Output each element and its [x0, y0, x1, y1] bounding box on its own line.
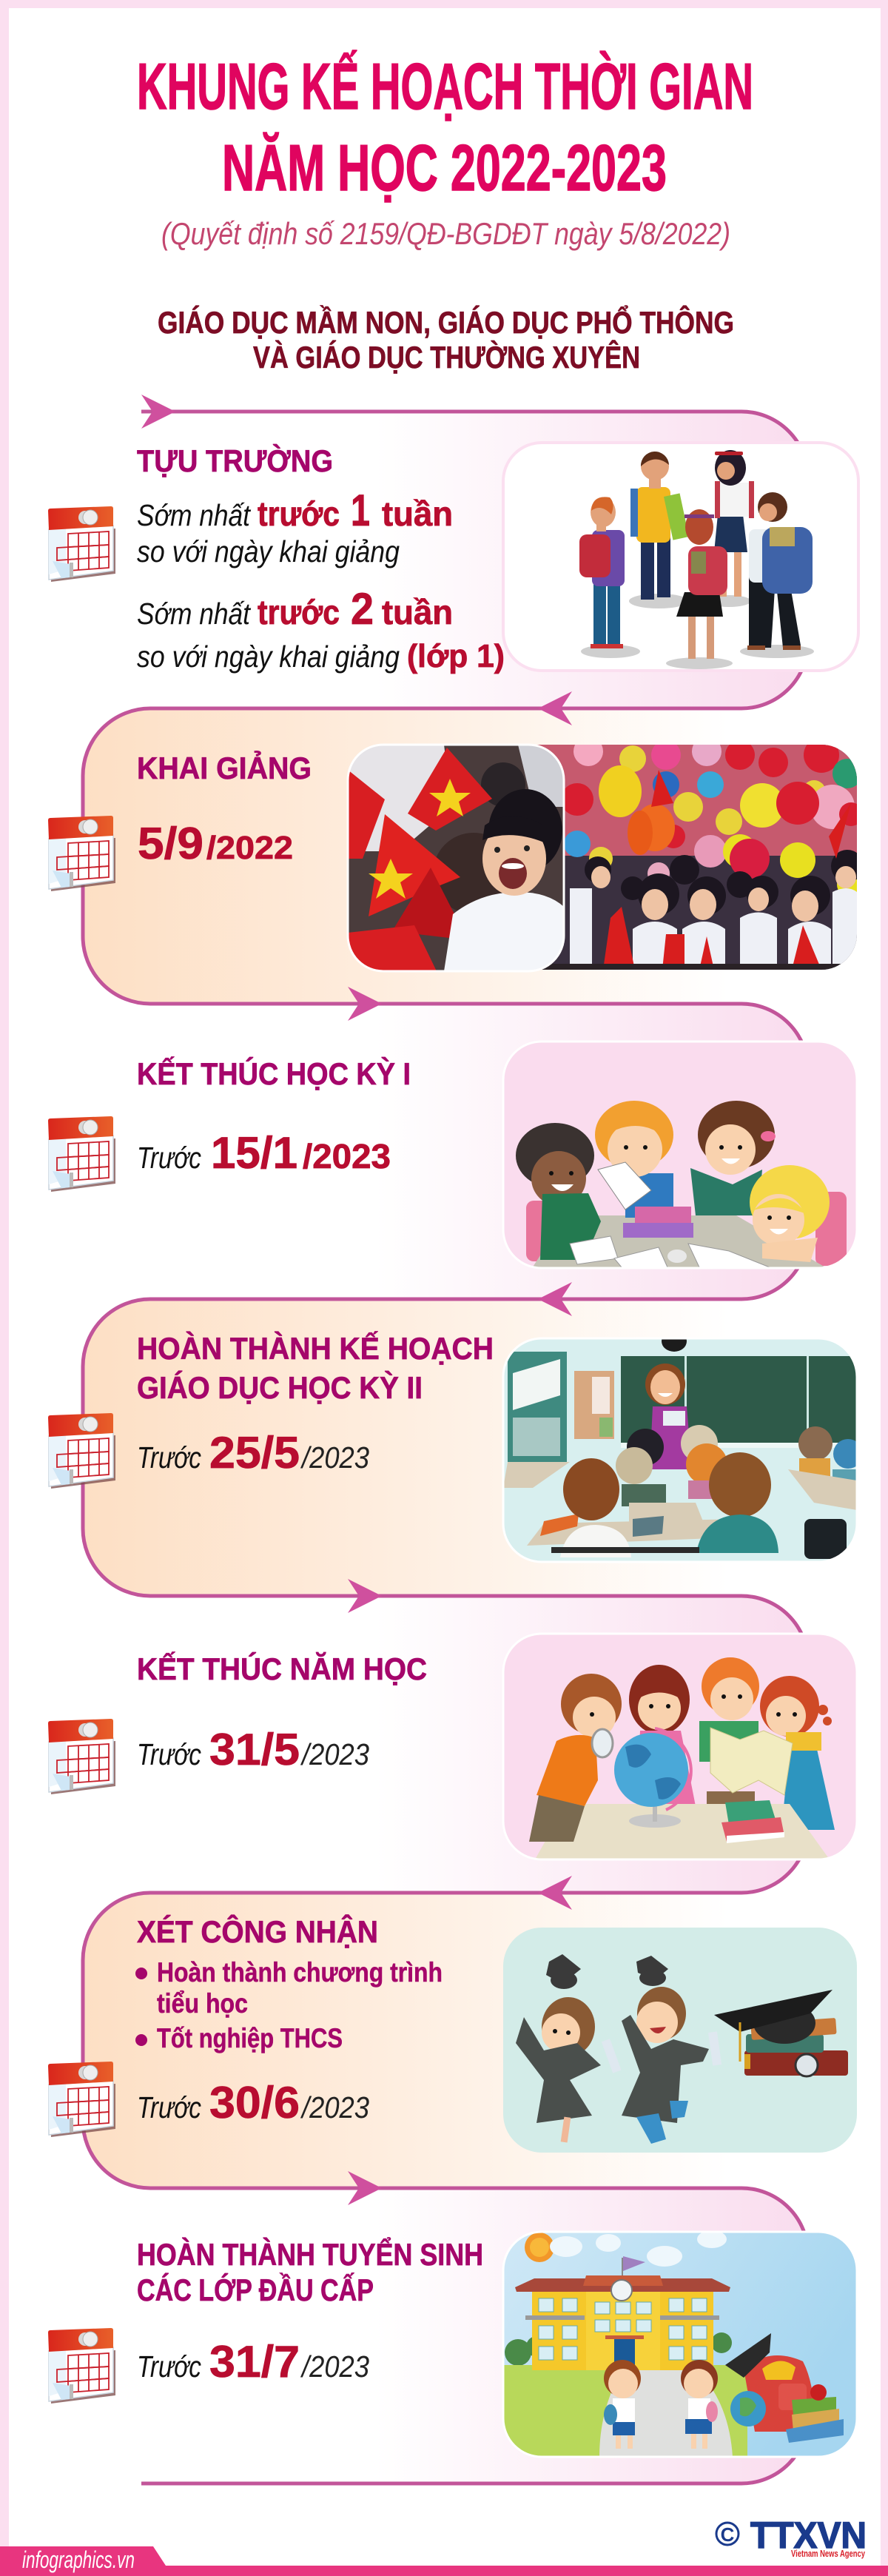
papers on table — [570, 1236, 770, 1267]
student A red backpack — [579, 497, 625, 648]
boy graduate — [622, 1987, 722, 2144]
text: two weeks early for grade 1: Sớm nhất — [137, 597, 251, 631]
section heading: GIÁO DỤC MẦM NON, GIÁO DỤC PHỔ THÔNG — [158, 303, 734, 340]
date: 25/5/2023 — [137, 1428, 369, 1477]
heading: ket thuc hoc ky I: KẾT THÚC HỌC KỲ I — [137, 1056, 411, 1091]
date: 5/9/2022: 5/9 — [138, 819, 204, 868]
date: 30/6/2023: 30/6 — [209, 2078, 300, 2127]
student E blue backpack — [747, 492, 813, 650]
section heading — [158, 303, 734, 375]
date: 15/1/2023: 15/1 — [211, 1128, 297, 1178]
text: two weeks early for grade 1 — [137, 584, 505, 674]
row 5: end of school year — [48, 1651, 427, 1794]
title — [137, 50, 753, 204]
trees — [505, 2332, 732, 2366]
icon: calendar — [48, 1116, 115, 1192]
heading: hoan thanh tuyen sinh cac lop dau cap: HOÀN THÀNH TUYỂN SINH — [137, 2236, 483, 2272]
text: one week early: so với ngày khai giảng — [137, 534, 400, 568]
date: 25/5/2023: 25/5 — [209, 1428, 300, 1477]
date: 31/7/2023: 31/7 — [209, 2337, 300, 2387]
date: 30/6/2023 — [137, 2078, 369, 2127]
backpack, globe, books — [725, 2333, 844, 2443]
frame of globe illustration — [503, 1634, 857, 1859]
illustration: classroom — [503, 1331, 863, 1562]
open book — [598, 1162, 651, 1210]
middle row of students — [616, 1425, 727, 1506]
folded map — [710, 1728, 793, 1795]
illustration: children with globe — [503, 1634, 857, 1859]
books and mortarboard — [714, 1990, 848, 2076]
icon: calendar — [48, 1413, 115, 1489]
text: two weeks early for grade 1: (lớp 1) — [407, 638, 505, 674]
row 3: end of semester 1 — [48, 1056, 411, 1192]
logo: TTXVN: C — [721, 2523, 735, 2546]
title: NĂM HỌC 2022-2023 — [222, 131, 667, 204]
building — [515, 2275, 730, 2370]
illustration: graduates jumping — [503, 1928, 857, 2153]
date: 15/1/2023: /2023 — [303, 1137, 391, 1175]
text: two weeks early for grade 1: tuần — [382, 593, 453, 631]
bullet list — [135, 1957, 443, 2053]
text: one week early: trước — [258, 494, 340, 533]
footer band — [0, 2546, 888, 2576]
text: one week early: 1 — [351, 486, 370, 535]
frame of child photo — [348, 745, 564, 971]
icon: calendar — [48, 506, 115, 582]
frame of classroom illustration — [503, 1338, 857, 1562]
row 7: finish enrollment — [48, 2236, 483, 2404]
desks — [503, 1462, 857, 1546]
heading: hoan thanh ke hoach giao duc hoc ky II: HOÀN THÀNH KẾ HOẠCH — [137, 1331, 494, 1366]
boy with orange hair — [595, 1101, 673, 1218]
bullet list: Hoàn thành chương trình — [157, 1957, 443, 1988]
illustration: group of students — [505, 444, 814, 669]
bullet list: tiểu học — [157, 1988, 248, 2019]
row 2: opening day — [48, 750, 312, 891]
girl — [681, 2360, 718, 2449]
icon: calendar — [48, 816, 115, 891]
boy in green with map — [699, 1657, 759, 1806]
girl graduate — [516, 1997, 622, 2143]
illustration: school building — [503, 2230, 857, 2457]
student B yellow jacket — [630, 452, 689, 600]
footer text: infographics.vn — [22, 2546, 135, 2573]
date: 30/6/2023: Trước — [137, 2090, 201, 2124]
globe — [614, 1728, 691, 1828]
boy with dark hair — [516, 1123, 601, 1260]
boy with magnifier — [529, 1674, 622, 1842]
text: two weeks early for grade 1: so với ngày khai giảng — [137, 640, 400, 674]
date: 5/9/2022: /2022 — [206, 830, 293, 866]
frame of student illustration — [503, 443, 858, 671]
heading: xet cong nhan: XÉT CÔNG NHẬN — [137, 1913, 378, 1949]
heading: ket thuc nam hoc: KẾT THÚC NĂM HỌC — [137, 1651, 427, 1686]
icon: calendar — [48, 2062, 115, 2137]
date: 25/5/2023: Trước — [137, 1440, 201, 1475]
date: 15/1/2023 — [137, 1128, 391, 1178]
sun and clouds — [525, 2230, 727, 2267]
arrows on the timeline — [141, 395, 572, 2205]
icon: calendar — [48, 1719, 115, 1794]
date: 31/5/2023: Trước — [137, 1737, 201, 1771]
logo: TTXVN — [716, 2515, 867, 2559]
boy — [604, 2360, 641, 2449]
bullet list: Tốt nghiệp THCS — [157, 2023, 343, 2053]
teacher with brown hair — [690, 1101, 776, 1215]
date: 30/6/2023: /2023 — [300, 2090, 369, 2124]
heading: tuu truong: TỰU TRƯỜNG — [137, 443, 333, 478]
date: 31/5/2023 — [137, 1725, 369, 1774]
stacked pink books — [623, 1207, 693, 1238]
frame of school illustration — [503, 2232, 857, 2457]
student D centre backpack — [676, 509, 727, 659]
heading: hoan thanh tuyen sinh cac lop dau cap — [137, 2236, 483, 2307]
date: 31/7/2023: /2023 — [300, 2349, 369, 2384]
right side students — [798, 1426, 855, 1480]
date: 31/7/2023: Trước — [137, 2349, 201, 2384]
date: 31/7/2023 — [137, 2337, 369, 2387]
frame of studying illustration — [503, 1042, 857, 1268]
date: 25/5/2023: /2023 — [300, 1440, 369, 1475]
text: one week early: Sớm nhất — [137, 498, 251, 532]
row background panels — [83, 412, 808, 2483]
blonde girl — [750, 1165, 830, 1262]
date: 31/5/2023: 31/5 — [209, 1725, 300, 1774]
flying caps — [546, 1954, 668, 1989]
heading: hoan thanh ke hoach giao duc hoc ky II — [137, 1331, 494, 1405]
row 4: complete semester 2 plan — [48, 1331, 494, 1489]
illustration: children studying — [503, 1042, 857, 1268]
text: one week early — [137, 486, 453, 568]
snake timeline line — [83, 412, 808, 2483]
heading: khai giang: KHAI GIẢNG — [137, 750, 312, 785]
teacher — [645, 1364, 692, 1469]
front students — [560, 1452, 778, 1557]
girl with red hair — [760, 1676, 835, 1830]
flag — [622, 2256, 645, 2284]
photo: students with balloons — [537, 745, 857, 970]
icon: calendar — [48, 2328, 115, 2404]
section heading: VÀ GIÁO DỤC THƯỜNG XUYÊN — [253, 339, 640, 375]
date: 31/5/2023: /2023 — [300, 1737, 369, 1771]
row 1: return to school — [48, 443, 505, 674]
subtitle: decision reference: (Quyết định số 2159/QĐ-BGDĐT ngày 5/8/2022) — [161, 216, 730, 251]
logo: TTXVN: TTXVN — [750, 2515, 867, 2556]
text: one week early: tuần — [382, 494, 453, 533]
student C navy skirt — [714, 450, 754, 597]
heading: hoan thanh ke hoach giao duc hoc ky II: GIÁO DỤC HỌC KỲ II — [137, 1370, 423, 1405]
row 6: recognition — [48, 1913, 443, 2137]
book stack — [722, 1800, 784, 1843]
girl with headband — [629, 1665, 696, 1806]
text: two weeks early for grade 1: trước — [258, 593, 340, 631]
text: two weeks early for grade 1: 2 — [351, 584, 374, 634]
date: 15/1/2023: Trước — [137, 1141, 201, 1175]
photo: smiling child with flags — [348, 745, 564, 971]
date: 5/9/2022 — [138, 819, 293, 868]
heading: hoan thanh tuyen sinh cac lop dau cap: CÁC LỚP ĐẦU CẤP — [137, 2272, 374, 2307]
